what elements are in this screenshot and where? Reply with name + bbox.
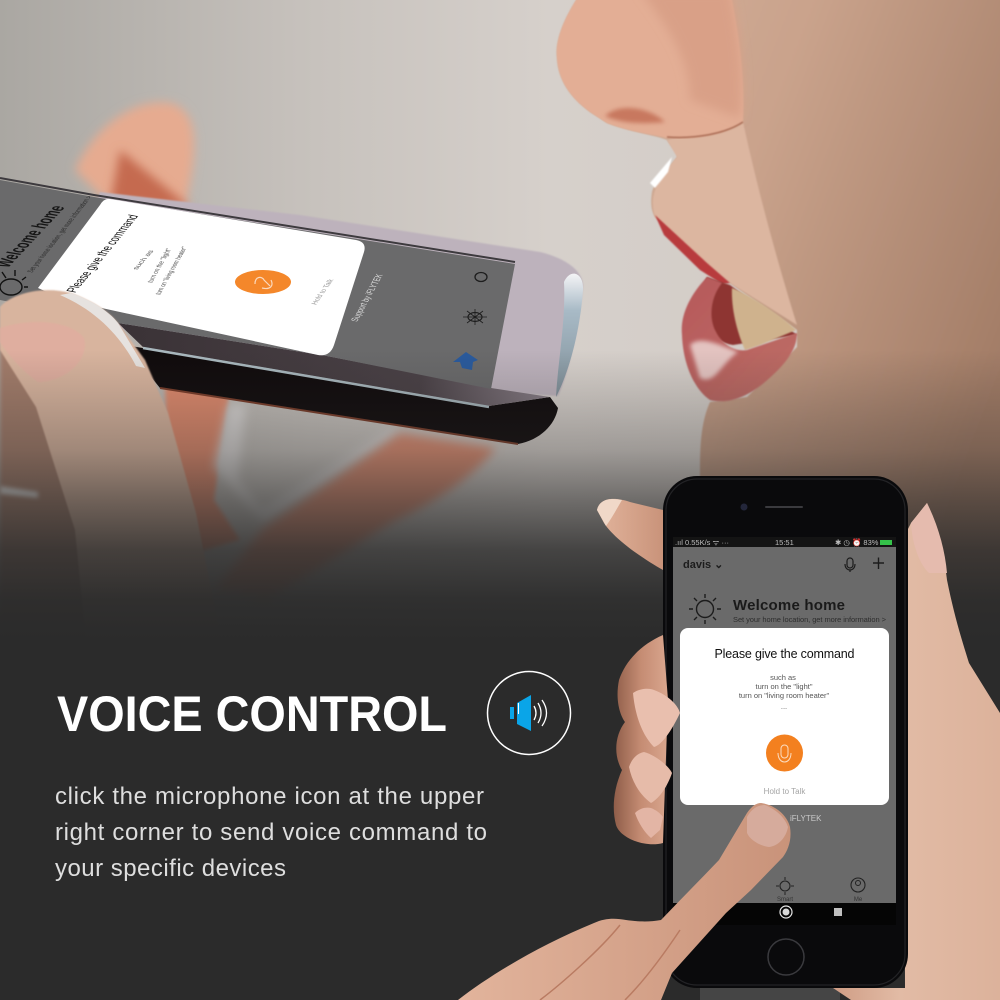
lower lip xyxy=(682,277,797,401)
user name: davis ⌄ xyxy=(683,559,723,571)
status bar: ✱ ◷ ⏰ 83% xyxy=(835,537,879,547)
nail two xyxy=(629,752,672,803)
description text: your specific devices xyxy=(55,855,286,882)
finger creases xyxy=(540,925,680,1000)
top orange mic button xyxy=(235,270,291,294)
home button xyxy=(768,939,804,975)
top finger xyxy=(597,499,663,570)
left fingers xyxy=(597,499,680,844)
dialog lines: turn on "living room heater" xyxy=(739,691,830,700)
home icon xyxy=(453,352,478,370)
thumb nail xyxy=(0,322,85,382)
thumb rim xyxy=(60,293,145,368)
phone edge glass xyxy=(556,274,583,397)
nostril xyxy=(605,108,665,123)
screen xyxy=(673,547,896,903)
orange mic xyxy=(766,734,803,772)
lip highlight xyxy=(650,157,672,188)
blurred hand behind top phone xyxy=(0,102,496,640)
card lines xyxy=(130,246,189,295)
plus icon xyxy=(873,558,884,569)
card lines: turn on the "light" xyxy=(146,248,174,283)
dialog lines: turn on the "light" xyxy=(755,682,813,691)
dialog heading: Please give the command xyxy=(714,647,855,661)
dialog lines xyxy=(739,673,830,711)
supported by: Support by iFLYTEK xyxy=(349,273,385,322)
smart tab xyxy=(776,877,794,903)
description text xyxy=(55,783,487,882)
hold to talk: Hold to Talk xyxy=(764,787,806,796)
nose xyxy=(557,0,743,138)
smart icon xyxy=(463,309,487,325)
top phone xyxy=(0,178,583,444)
camera xyxy=(740,504,748,510)
top phone white card xyxy=(38,199,365,355)
dialog lines: such as xyxy=(770,673,796,682)
mic header icon xyxy=(845,558,855,572)
sun icon on top phone xyxy=(0,270,28,295)
mouth interior xyxy=(701,277,797,345)
me tab: Me xyxy=(854,897,863,903)
status bar: 15:51 xyxy=(775,538,794,547)
top edge line xyxy=(0,178,515,262)
upper lip red line xyxy=(655,215,730,284)
upper lip skin xyxy=(653,122,797,325)
phone mauve band xyxy=(118,323,550,406)
status bar: .ııl 0.55K/s ᯤ ··· xyxy=(675,538,729,547)
me tab xyxy=(851,878,865,903)
earpiece xyxy=(765,506,803,508)
phone black side xyxy=(125,345,558,444)
status bar xyxy=(673,537,896,547)
phone lavender body xyxy=(60,192,583,396)
nail three xyxy=(635,808,663,838)
pressing finger and hand xyxy=(458,803,791,1000)
dark strip below phone xyxy=(700,985,840,1000)
iflytek label: iFLYTEK xyxy=(790,814,822,823)
description text: right corner to send voice command to xyxy=(55,819,487,846)
card lines: turn on "living room heater" xyxy=(155,246,189,295)
right phone xyxy=(663,476,908,988)
welcome heading: Welcome home xyxy=(733,597,845,614)
lip gloss xyxy=(690,341,738,379)
top finger nail xyxy=(597,499,622,526)
white dialog xyxy=(680,628,889,805)
subtitle on angled screen: Set your home location, get more information > xyxy=(26,195,94,273)
description text: click the microphone icon at the upper xyxy=(55,783,484,810)
nail one xyxy=(633,689,680,747)
phone brown reflection xyxy=(160,388,518,444)
nose crease xyxy=(667,122,743,137)
folded fingers xyxy=(614,635,668,844)
card heading: Please give the command xyxy=(64,214,142,294)
hold to talk: Hold to Talk xyxy=(311,278,336,305)
me icon xyxy=(475,272,487,282)
top phone screen xyxy=(0,180,515,389)
smart tab: Smart xyxy=(777,897,793,903)
right hand xyxy=(833,503,1000,1000)
bottom dark overlay xyxy=(0,350,1000,640)
thumb over top phone xyxy=(0,290,221,640)
right nail xyxy=(911,503,947,573)
speaker icon xyxy=(488,672,570,754)
dialog lines: ... xyxy=(781,702,787,711)
pressing nail xyxy=(747,805,788,847)
android nav bar xyxy=(673,903,896,925)
welcome subtitle: Set your home location, get more information > xyxy=(733,615,887,624)
sun icon xyxy=(689,594,721,624)
card lines: such as xyxy=(130,249,156,270)
title: VOICE CONTROL xyxy=(57,686,447,742)
teeth xyxy=(732,288,796,350)
nose shadow xyxy=(640,0,742,118)
phone silver strip xyxy=(143,348,489,407)
face xyxy=(557,0,1000,640)
